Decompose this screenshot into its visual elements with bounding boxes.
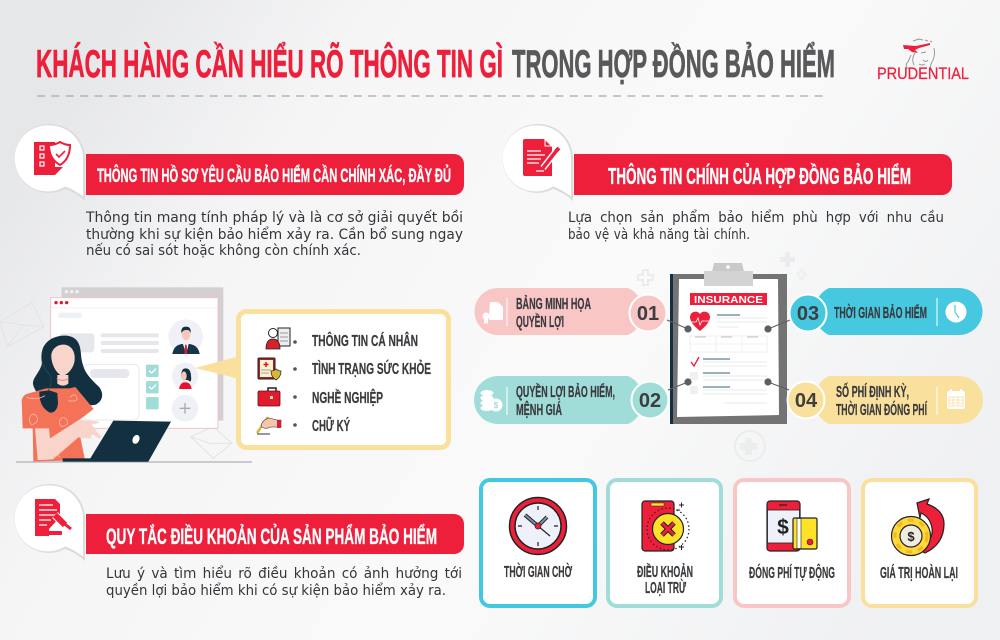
list item: health status: TÌNH TRẠNG SỨC KHỎE — [312, 359, 431, 378]
text block: bảo vệ và khả năng tài chính. — [568, 227, 750, 243]
logo: Prudential — [877, 39, 969, 83]
pill 02: benefits and face value: $ — [494, 401, 499, 410]
icon: wall clock — [510, 498, 566, 554]
illustration: profile window — [0, 287, 232, 458]
pill 03: coverage term: 03 — [797, 303, 819, 325]
list item: signature: CHỮ KÝ — [312, 415, 350, 435]
text block: quyền lợi bảo hiểm khi có sự kiện bảo hiểm xảy ra. — [106, 582, 446, 599]
card: surrender value — [863, 480, 976, 606]
list item: occupation: NGHỀ NGHIỆP — [312, 388, 383, 407]
list item: personal information: THÔNG TIN CÁ NHÂN — [312, 331, 418, 350]
icon: phone and credit card: $ — [777, 516, 789, 539]
pill 01: benefit illustration table: BẢNG MINH HỌA — [516, 294, 591, 313]
card: waiting period: THỜI GIAN CHỜ — [504, 562, 572, 581]
list item: personal information — [266, 328, 418, 350]
card: automatic premium payment — [735, 480, 849, 606]
insurance label: INSURANCE — [694, 295, 763, 306]
card: automatic premium payment: ĐÓNG PHÍ TỰ ĐỘNG — [749, 563, 835, 582]
card: exclusion terms: ĐIỀU KHOẢN — [637, 562, 693, 581]
icon: phone with cross — [642, 501, 689, 551]
pill 03: coverage term: THỜI GIAN BẢO HIỂM — [834, 303, 927, 322]
pill 02: benefits and face value: MỆNH GIÁ — [516, 400, 562, 419]
icon: checklist with shield bubble — [14, 124, 85, 201]
list item: occupation — [258, 388, 383, 407]
pill 01: benefit illustration table — [474, 288, 666, 335]
pill 04: periodic premium and payment term: THỜI GIAN ĐÓNG PHÍ — [836, 400, 927, 419]
card: exclusion terms: LOẠI TRỪ — [645, 578, 686, 597]
pill 04: periodic premium and payment term — [788, 376, 983, 424]
panel: main contract information section — [502, 124, 952, 243]
pill 03: coverage term — [790, 288, 982, 335]
clipboard: insurance form — [670, 263, 787, 424]
insurance label — [690, 293, 767, 306]
banner heading: QUY TẮC ĐIỀU KHOẢN CỦA SẢN PHẨM BẢO HIỂM — [106, 524, 437, 549]
logo: Prudential: PRUDENTIAL — [877, 64, 969, 83]
panel: policy rules and terms section — [14, 484, 464, 599]
pill 04: periodic premium and payment term: 04 — [795, 390, 818, 412]
pill 01: benefit illustration table: 01 — [637, 303, 659, 325]
icon: document with pen bubble — [502, 124, 573, 201]
pill 01: benefit illustration table: QUYỀN LỢI — [516, 312, 564, 331]
pill 02: benefits and face value: QUYỀN LỢI BẢO HIỂM, — [516, 382, 615, 401]
illustration: woman using laptop — [16, 336, 252, 463]
icon: clock — [946, 302, 966, 322]
text block: Lựa chọn sản phẩm bảo hiểm phù hợp với nhu cầu — [568, 209, 944, 226]
list item: health status — [258, 358, 431, 380]
panel: customer information section — [14, 124, 464, 259]
text block: Lưu ý và tìm hiểu rõ điều khoản có ảnh hưởng tới — [106, 565, 462, 582]
text block — [106, 565, 462, 599]
card: exclusion terms — [608, 480, 721, 606]
text block: Thông tin mang tính pháp lý và là cơ sở giải quyết bồi — [85, 209, 463, 226]
text block: thường khi sự kiện bảo hiểm xảy ra. Cần bổ sung ngay — [86, 226, 463, 243]
pill 02: benefits and face value — [474, 376, 668, 424]
pill 04: periodic premium and payment term: SỐ PHÍ ĐỊNH KỲ, — [836, 381, 909, 401]
banner heading — [574, 154, 952, 195]
card: waiting period — [481, 480, 595, 606]
text block: nếu có sai sót hoặc không còn chính xác. — [86, 242, 361, 259]
banner heading — [86, 154, 464, 195]
icon: coins with dollar — [480, 390, 502, 412]
callout: profile information list — [195, 312, 448, 448]
banner heading: THÔNG TIN HỒ SƠ YÊU CẦU BẢO HIỂM CẦN CHÍNH XÁC, ĐẦY ĐỦ — [97, 165, 451, 187]
icon: calendar — [947, 389, 965, 409]
text block — [568, 209, 944, 243]
text block — [85, 209, 463, 259]
icon: coin with return arrow: $ — [907, 529, 915, 544]
pill 02: benefits and face value: 02 — [639, 390, 661, 412]
icon: document with gavel bubble — [14, 484, 85, 561]
list item: signature — [257, 415, 350, 435]
title: KHÁCH HÀNG CẦN HIỂU RÕ THÔNG TIN GÌ — [36, 41, 503, 86]
icon: documents — [482, 302, 503, 324]
icon: heart — [690, 312, 710, 331]
banner heading — [86, 514, 464, 554]
connector lines — [667, 320, 790, 390]
